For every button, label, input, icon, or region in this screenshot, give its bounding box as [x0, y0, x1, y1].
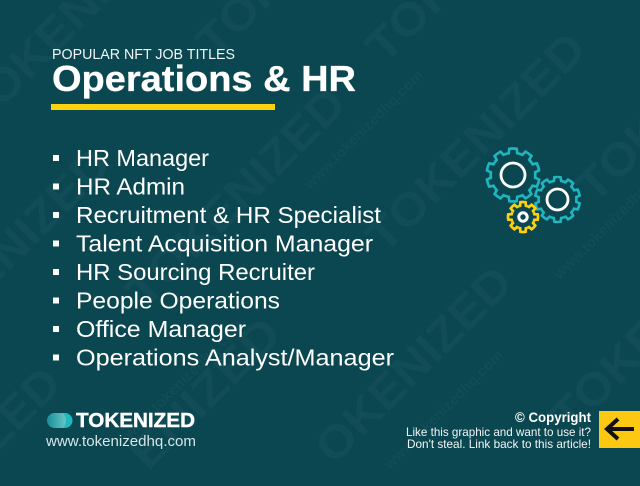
item: People Operations: People Operations [76, 288, 280, 314]
watermark pattern: ENIZED [118, 307, 291, 479]
copyright line 2: Don't steal. Link back to this article! [407, 437, 591, 451]
logo mark [47, 413, 72, 428]
item: HR Admin: HR Admin [76, 174, 185, 200]
item: Office Manager: Office Manager [76, 316, 246, 342]
watermark pattern: TOKENIZED [115, 77, 356, 317]
copyright notice [406, 409, 591, 451]
copyright line 1: Like this graphic and want to use it? [406, 425, 591, 439]
item: Talent Acquisition Manager: Talent Acquisition Manager [76, 230, 373, 256]
medium teal gear [534, 177, 581, 222]
back arrow button [599, 411, 640, 448]
small yellow gear [508, 202, 538, 232]
watermark pattern: TOKENIZED [355, 22, 596, 262]
copyright heading: © Copyright [515, 409, 591, 425]
watermark pattern: www.tokenizedhq.com [120, 317, 247, 444]
icon: arrow [607, 419, 634, 439]
logo wordmark: TOKENIZED [76, 410, 195, 432]
title underline [51, 104, 275, 110]
watermark pattern: OKENIZED [304, 255, 522, 473]
logo [47, 410, 195, 432]
title: Operations & HR [52, 58, 356, 99]
watermark pattern: www.tokenizedhq.com [300, 67, 427, 194]
icon: gears [486, 149, 581, 232]
website url: www.tokenizedhq.com [45, 433, 196, 450]
item: Operations Analyst/Manager: Operations Analyst/Manager [76, 344, 394, 370]
watermark pattern: www.tokenizedhq.com [380, 347, 507, 474]
job titles list [53, 145, 394, 370]
large teal gear [486, 149, 540, 201]
item: HR Manager: HR Manager [76, 145, 209, 171]
item: HR Sourcing Recruiter: HR Sourcing Recruiter [76, 259, 315, 285]
eyebrow heading: POPULAR NFT JOB TITLES [52, 46, 235, 63]
item: Recruitment & HR Specialist: Recruitment & HR Specialist [76, 202, 382, 228]
